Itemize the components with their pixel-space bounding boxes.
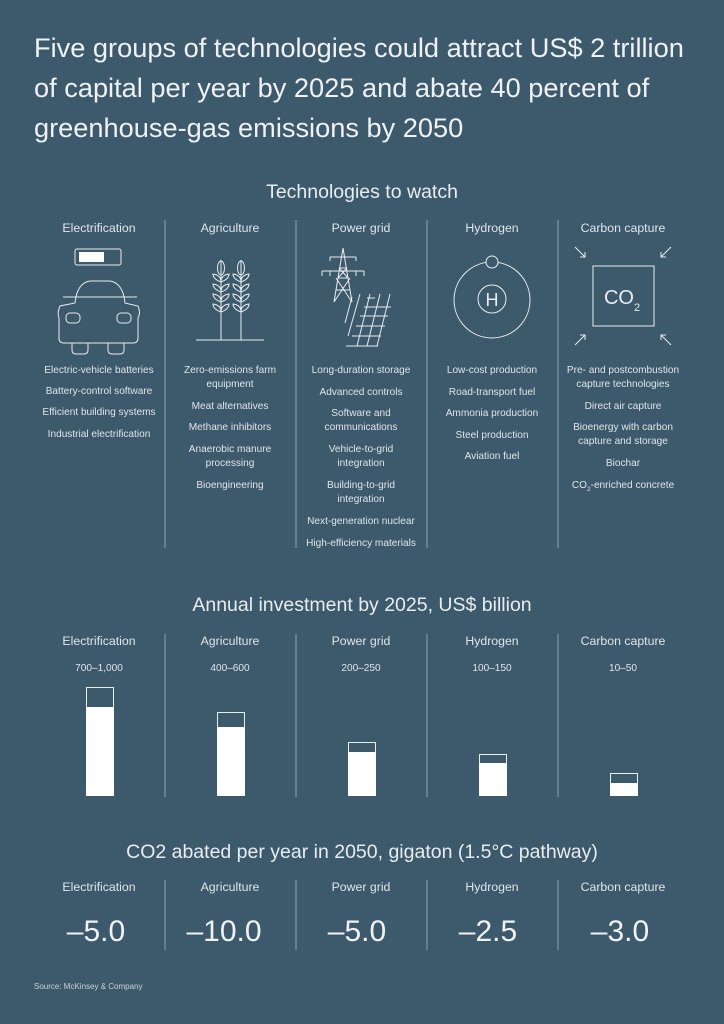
lists: technologies: Advanced controls [319,387,403,398]
investment values [75,663,637,674]
bar chart: investment ranges [86,688,638,796]
icon: CO2 capture [575,247,671,345]
column headings: abatement: Electrification [62,880,136,894]
abatement values [67,915,649,948]
investment values: 400–600 [210,663,250,674]
column headings: abatement: Agriculture [201,880,260,894]
lists: technologies: Methane inhibitors [189,422,271,433]
lists: technologies: capture technologies [576,379,670,390]
lists: technologies: Building-to-grid [327,480,395,491]
lists: technologies: Zero-emissions farm [184,365,276,376]
column headings: technologies: Agriculture [201,221,260,235]
column headings: abatement [62,880,666,894]
abatement values: –2.5 [459,915,517,948]
icon: pylon and solar panel [322,248,391,346]
investment values: 700–1,000 [75,663,123,674]
icon: battery and car [58,249,140,354]
column headings: investment: Power grid [332,634,391,648]
lists: technologies: High-efficiency materials [306,538,416,549]
title: greenhouse-gas emissions by 2050 [34,112,463,143]
icon: hydrogen atom [454,256,530,338]
section heading: annual investment: Annual investment by 2025, US$ billion [192,594,532,616]
lists: technologies: Long-duration storage [312,365,411,376]
lists: technologies: Biochar [606,458,641,469]
column headings: investment: Hydrogen [465,634,519,648]
lists: technologies: Next-generation nuclear [307,516,416,527]
title [34,32,684,143]
abatement values: –3.0 [591,915,649,948]
column headings: technologies: Carbon capture [581,221,666,235]
lists: technologies: Software and [331,408,391,419]
lists: technologies: Pre- and postcombustion [567,365,679,376]
lists: technologies: -enriched concrete [591,480,675,491]
lists: technologies [42,365,679,549]
lists: technologies: Bioengineering [196,480,264,491]
lists: technologies: Direct air capture [585,401,662,412]
column headings: technologies: Hydrogen [465,221,519,235]
lists: technologies: integration [337,494,385,505]
title: Five groups of technologies could attract US$ 2 trillion [34,32,684,63]
column headings: technologies [62,221,666,235]
column headings: investment: Electrification [62,634,136,648]
icon: hydrogen atom: H [486,290,498,310]
icon: CO2 capture: 2 [634,302,640,314]
lists: technologies: Vehicle-to-grid [329,444,393,455]
column headings: investment [62,634,666,648]
column headings: abatement: Carbon capture [581,880,666,894]
section heading: technologies to watch: Technologies to watch [266,181,458,203]
lists: technologies: Industrial electrification [48,429,150,440]
lists: technologies: equipment [206,379,254,390]
lists: technologies: Aviation fuel [465,451,519,462]
lists: technologies: Road-transport fuel [449,387,535,398]
lists: technologies: Low-cost production [447,365,537,376]
lists: technologies: Meat alternatives [192,401,268,412]
lists: technologies: capture and storage [578,436,668,447]
lists: technologies: Bioenergy with carbon [573,422,673,433]
lists: technologies: Anaerobic manure [189,444,272,455]
column headings: technologies: Electrification [62,221,136,235]
abatement values: –5.0 [67,915,125,948]
lists: technologies: CO [572,480,587,491]
lists: technologies: Steel production [456,430,528,441]
lists: technologies: Ammonia production [446,408,538,419]
lists: technologies: Efficient building systems [42,407,156,418]
section heading: CO2 abated: CO2 abated per year in 2050, gigaton (1.5°C pathway) [126,841,598,863]
lists: technologies: communications [325,422,397,433]
source: Source: McKinsey & Company [34,982,142,991]
lists: technologies: integration [337,458,385,469]
title: of capital per year by 2025 and abate 40 percent of [34,72,650,103]
column headings: abatement: Power grid [332,880,391,894]
investment values: 200–250 [341,663,381,674]
lists: technologies: Battery-control software [46,386,153,397]
investment values: 10–50 [609,663,637,674]
investment values: 100–150 [472,663,512,674]
abatement values: –10.0 [186,915,262,948]
column headings: investment: Carbon capture [581,634,666,648]
abatement values: –5.0 [328,915,386,948]
column headings: abatement: Hydrogen [465,880,519,894]
column headings: technologies: Power grid [332,221,391,235]
lists: technologies: 2 [587,486,591,493]
lists: technologies: Electric-vehicle batteries [44,365,154,376]
icon: CO2 capture: CO [604,287,634,309]
lists: technologies: processing [206,458,254,469]
icon: wheat [196,260,264,340]
column headings: investment: Agriculture [201,634,260,648]
